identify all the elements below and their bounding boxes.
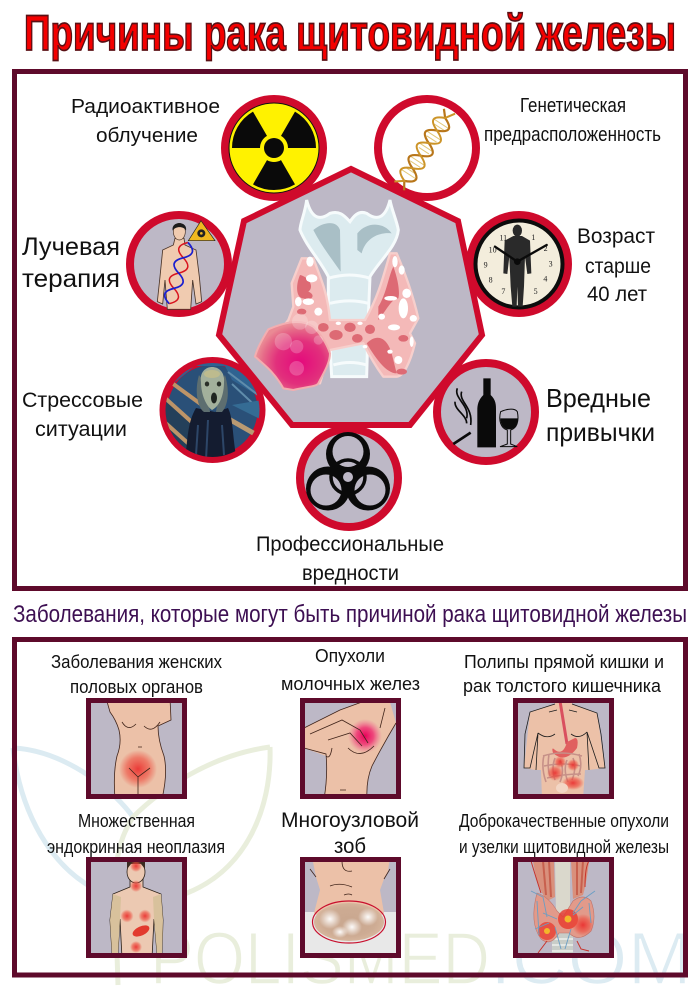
icon: clock with silhouette: 11 (499, 234, 507, 243)
label: stress (22, 389, 143, 441)
tile: female torso (86, 698, 187, 799)
label: breast tumours: Опухоли (315, 646, 385, 666)
label: radioactive: Радиоактивное (71, 95, 220, 118)
icon: man irradiated with DNA (130, 215, 228, 313)
label: age: Возраст (577, 225, 655, 248)
icon: clock with silhouette: 1 (531, 233, 535, 242)
label: multinodular goitre (281, 809, 419, 858)
icon: clock with silhouette: 3 (549, 260, 553, 269)
label: genetic: предрасположенность (484, 124, 661, 146)
label: age: 40 лет (587, 283, 647, 306)
label: radiation therapy: Лучевая (22, 233, 120, 261)
label: radiation therapy: терапия (22, 265, 120, 293)
label: occupational hazards: вредности (302, 562, 399, 585)
panel: diseases frame (14, 640, 686, 975)
label: stress: Стрессовые (22, 389, 143, 412)
label: stress: ситуации (35, 418, 127, 441)
tile: neck goitre (300, 857, 401, 958)
label: endocrine neoplasia (47, 811, 225, 857)
icon: radiation trefoil (225, 99, 323, 197)
panel: causes frame (14, 72, 686, 588)
icon: clock with silhouette: 7 (501, 287, 505, 296)
label: bad habits: привычки (546, 417, 655, 447)
central heptagon with thyroid (219, 169, 482, 425)
label: bad habits: Вредные (546, 383, 651, 413)
icon: clock with silhouette: 5 (534, 287, 538, 296)
icon: The Scream painting (160, 360, 265, 465)
icon: biohazard (300, 429, 398, 527)
label: occupational hazards: Профессиональные (256, 533, 444, 556)
label: age: старше (585, 255, 651, 278)
icon: clock with silhouette: 8 (489, 276, 493, 285)
label: benign tumours and nodules (459, 811, 669, 857)
label: radiation therapy (22, 233, 120, 293)
icon: clock with silhouette: 2 (544, 244, 548, 253)
label: benign tumours and nodules: Доброкачественные опухоли (459, 811, 669, 831)
label: genetic: Генетическая (520, 95, 626, 117)
watermark: leaf logo and POLISMED.COM (13, 747, 692, 990)
icon: clock with silhouette: 9 (484, 261, 488, 270)
label: female diseases (51, 652, 222, 697)
label: multinodular goitre: зоб (334, 835, 366, 858)
tile: digestive tract (513, 698, 614, 799)
label: breast tumours (281, 646, 420, 694)
tile: man with spots (86, 857, 187, 958)
label: occupational hazards (256, 533, 444, 585)
icon: thyroid gland with tumour (255, 200, 418, 390)
tile: breast exam (300, 698, 401, 799)
label: radioactive: облучение (96, 124, 198, 147)
label: benign tumours and nodules: и узелки щитовидной железы (459, 837, 669, 857)
icon: clock with silhouette: 10 (489, 246, 497, 255)
label: multinodular goitre: Многоузловой (281, 809, 419, 832)
label: female diseases: половых органов (70, 677, 203, 697)
label: genetic (484, 95, 661, 146)
label: age (577, 225, 655, 306)
label: female diseases: Заболевания женских (51, 652, 222, 672)
label: bad habits (546, 383, 655, 447)
label: polyps and colon cancer (463, 652, 664, 696)
icon: DNA helix (378, 99, 476, 197)
label: radioactive (71, 95, 220, 147)
icon: clock with silhouette: 4 (543, 275, 547, 284)
label: endocrine neoplasia: эндокринная неоплазия (47, 837, 225, 857)
label: breast tumours: молочных желез (281, 674, 420, 694)
label: polyps and colon cancer: Полипы прямой кишки и (464, 652, 664, 672)
label: polyps and colon cancer: рак толстого кишечника (463, 676, 662, 696)
tile: thyroid nodules anatomy (513, 857, 614, 958)
label: endocrine neoplasia: Множественная (78, 811, 195, 831)
icon: clock with silhouette (470, 215, 568, 313)
icon: smoking and alcohol (437, 363, 535, 461)
